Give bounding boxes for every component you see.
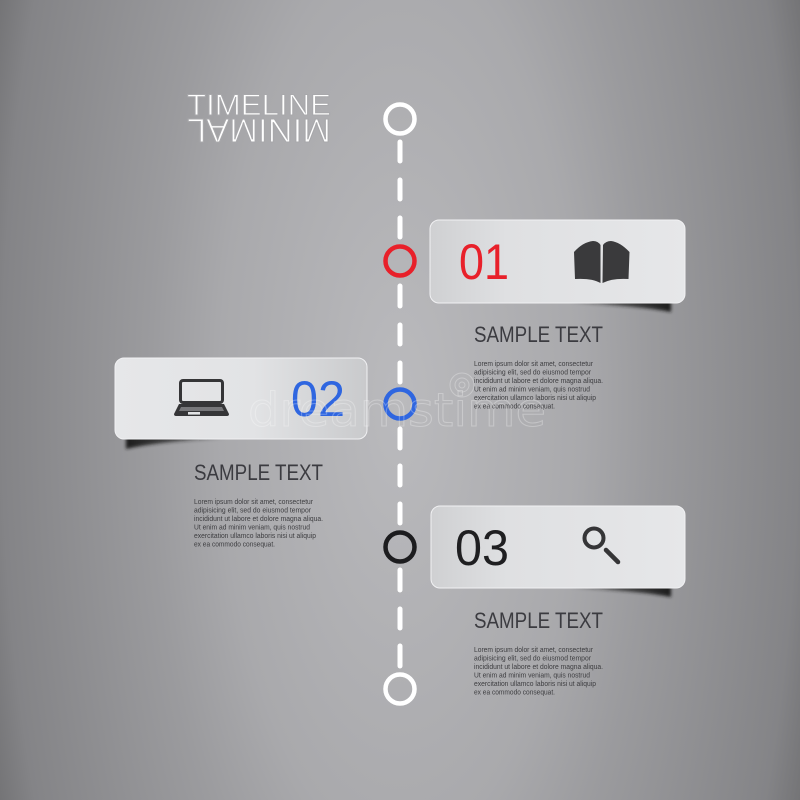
card	[115, 358, 367, 439]
panel: step 02 text	[194, 460, 323, 548]
card	[431, 506, 685, 588]
card shadow	[570, 585, 671, 597]
body text: adipisicing elit, sed do eiusmod tempor	[474, 370, 592, 376]
heading: SAMPLE TEXT	[474, 322, 603, 347]
number 03: 03	[455, 520, 509, 576]
body text: exercitation ullamco laboris nisi ut aliquip	[474, 681, 596, 688]
heading: SAMPLE TEXT	[194, 460, 323, 485]
title: mirrored MINIMAL: MINIMAL	[187, 112, 331, 149]
body text: Ut enim ad minim veniam, quis nostrud	[474, 672, 590, 680]
node: start circle	[386, 104, 414, 134]
card shadow	[570, 300, 671, 312]
number 02: 02	[291, 371, 345, 427]
body text: Lorem ipsum dolor sit amet, consectetur	[474, 647, 594, 654]
body text: Lorem ipsum dolor sit amet, consectetur	[474, 361, 594, 368]
body text: ex ea commodo consequat.	[474, 404, 555, 410]
body text: incididunt ut labore et dolore magna aliqua.	[474, 378, 603, 385]
panel: step 03	[431, 506, 685, 597]
body text: adipisicing elit, sed do eiusmod tempor	[474, 656, 592, 662]
icon: laptop	[174, 380, 229, 416]
panel: step 02	[115, 358, 367, 449]
body text: incididunt ut labore et dolore magna aliqua.	[194, 516, 323, 523]
body text	[194, 499, 323, 548]
body text: Lorem ipsum dolor sit amet, consectetur	[194, 499, 314, 506]
panel: step 03 text	[474, 608, 603, 696]
body text	[474, 647, 603, 696]
node: black circle	[386, 532, 414, 562]
watermark: dreamstime	[248, 383, 546, 437]
icon: magnifier	[584, 528, 618, 562]
card shadow	[126, 436, 225, 449]
body text: exercitation ullamco laboris nisi ut aliquip	[194, 533, 316, 540]
body text: Ut enim ad minim veniam, quis nostrud	[194, 524, 310, 532]
heading: SAMPLE TEXT	[474, 608, 603, 633]
body text: incididunt ut labore et dolore magna aliqua.	[474, 664, 603, 671]
title: TIMELINE: TIMELINE	[187, 89, 331, 122]
node: end circle	[386, 674, 414, 704]
body text: ex ea commodo consequat.	[194, 542, 275, 548]
card	[430, 220, 685, 303]
body text	[474, 361, 603, 410]
body text: adipisicing elit, sed do eiusmod tempor	[194, 508, 312, 514]
panel: step 01	[430, 220, 685, 312]
number 01: 01	[459, 234, 509, 290]
icon: book	[574, 241, 630, 283]
dashed timeline line	[398, 142, 402, 666]
body text: exercitation ullamco laboris nisi ut aliquip	[474, 395, 596, 402]
node: blue circle	[386, 390, 414, 418]
body text: Ut enim ad minim veniam, quis nostrud	[474, 386, 590, 394]
title	[187, 89, 331, 149]
panel: step 01 text	[474, 322, 603, 410]
node: red circle	[386, 246, 414, 276]
body text: ex ea commodo consequat.	[474, 690, 555, 696]
